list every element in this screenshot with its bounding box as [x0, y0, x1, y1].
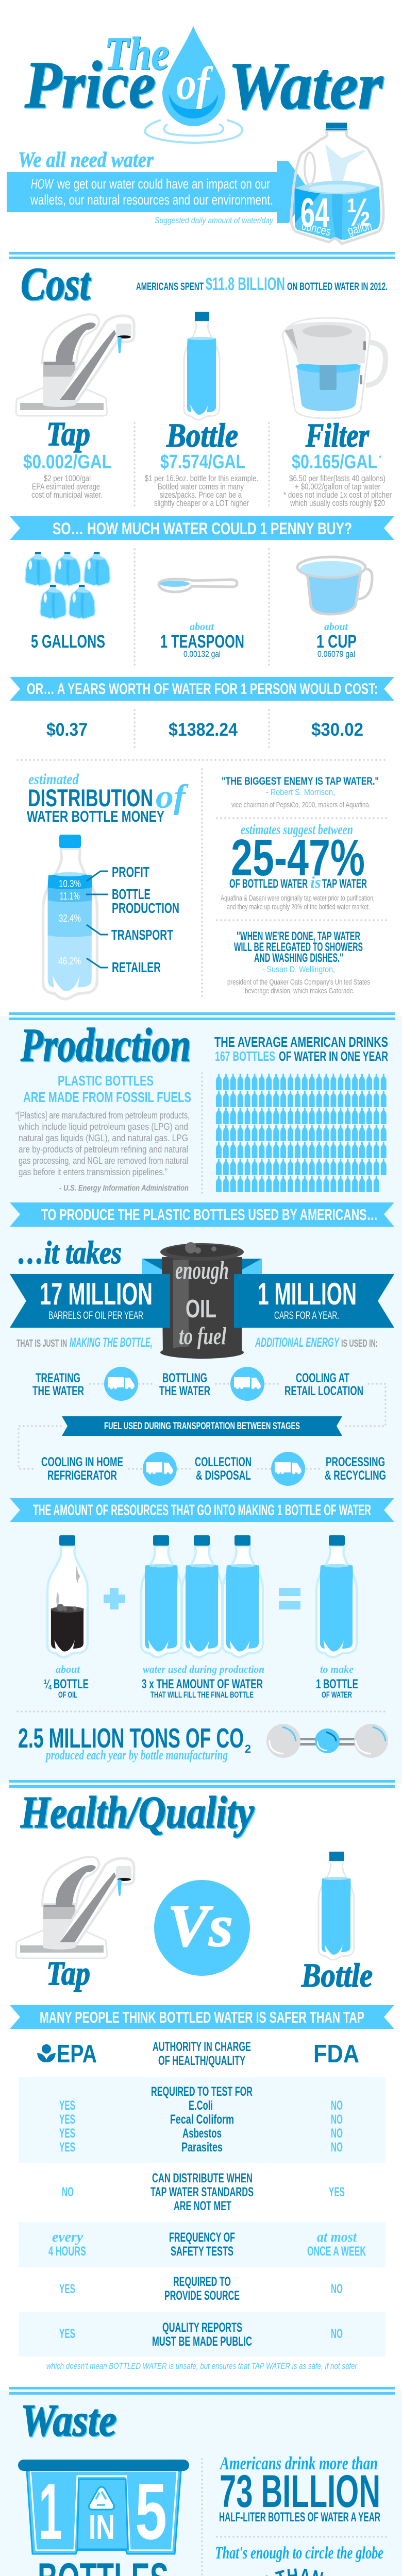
chart: bottle with money split: RETAILER — [112, 959, 161, 975]
labels: tap and bottle — [46, 1955, 373, 1994]
yearly costs: $0.37 — [46, 720, 88, 740]
icon: half gallon jug: ounces — [300, 219, 332, 239]
heading: waste: Waste — [21, 2396, 116, 2446]
divider rules — [9, 1780, 395, 1788]
stage: bottling the water: BOTTLING — [162, 1371, 207, 1385]
row: frequency: FREQUENCY OF — [169, 2230, 235, 2245]
chart: bottle with money split: TRANSPORT — [111, 927, 173, 943]
caption: suggested daily amount: Suggested daily amount of water/day — [155, 216, 274, 225]
notes: price explanations: $1 per 16.9oz. bottle for this example. — [145, 473, 258, 483]
text: just in making the bottle: ADDITIONAL ENERGY — [255, 1335, 340, 1350]
badge: vs — [154, 1880, 250, 1976]
labels: amounts: 1 CUP — [316, 632, 357, 652]
ribbon: fuel used — [62, 1416, 342, 1436]
row: frequency — [48, 2229, 366, 2259]
row: quality reports: YES — [59, 2327, 75, 2341]
illustration: oil barrel and ribbon — [10, 1242, 394, 1359]
title: of — [176, 58, 213, 109]
bottle: water 2 — [182, 1535, 222, 1657]
quote: plastics text — [15, 1110, 190, 1193]
icon: recycling bin 1 in 5: IN — [89, 2508, 115, 2547]
icon: measuring cup — [297, 557, 372, 614]
labels: tap bottle filter — [46, 415, 370, 454]
panel: health and quality — [10, 1788, 394, 2371]
yearly costs: $30.02 — [311, 720, 363, 740]
notes: price explanations — [31, 473, 392, 508]
labels: amounts: 1 TEASPOON — [160, 632, 244, 652]
prices: * — [379, 453, 382, 462]
notes: price explanations: EPA estimated average — [32, 482, 100, 492]
labels: equation captions: 1 BOTTLE — [316, 1677, 358, 1691]
chart: bottle with money split: 32.4% — [59, 913, 81, 924]
heading: distribution: DISTRIBUTION — [28, 784, 153, 811]
labels: tap bottle filter: Filter — [305, 417, 370, 454]
panel: cost — [16, 259, 392, 508]
ribbon: safer than tap — [10, 2005, 394, 2029]
panel: one penny — [10, 516, 394, 998]
logo: EPA — [37, 2040, 97, 2068]
stage: cooling in home — [41, 1455, 123, 1483]
stage: bottling the water: THE WATER — [159, 1384, 210, 1398]
icon: five gallon jugs — [25, 552, 110, 619]
arrow banner: we get our water could have an impact on our — [57, 176, 270, 192]
row: required to test: NO — [331, 2126, 343, 2141]
illustration: oil barrel and ribbon: OIL — [186, 1295, 216, 1323]
row: required to test: E.Coli — [189, 2098, 213, 2113]
title — [24, 28, 383, 123]
heading: distribution: WATER BOTTLE MONEY — [27, 807, 164, 825]
ribbon: how much water — [10, 516, 394, 540]
labels: equation captions: OF OIL — [58, 1690, 77, 1700]
chart: 167 bottle pictogram — [216, 1074, 388, 1193]
stat: 25-47 percent: is — [310, 873, 321, 891]
icon: recycling bin 1 in 5 — [18, 2460, 189, 2556]
icon: faucet — [16, 314, 134, 416]
row: required to test: Parasites — [181, 2140, 223, 2155]
chart: bottle with money split: BOTTLE — [112, 886, 150, 902]
row: can distribute: ARE NOT MET — [174, 2199, 231, 2213]
row: frequency: ONCE A WEEK — [307, 2244, 366, 2259]
illustration: oil barrel and ribbon: 17 MILLION — [40, 1277, 153, 1311]
row: quality reports: QUALITY REPORTS — [162, 2320, 242, 2335]
heading: distribution — [27, 771, 189, 825]
labels: amounts — [31, 632, 357, 659]
labels: about: about — [190, 620, 214, 633]
stage: cooling in home: REFRIGERATOR — [47, 1468, 117, 1483]
icon: water drop with ripples — [145, 26, 242, 143]
stage: cooling in home: COOLING IN HOME — [41, 1455, 123, 1469]
heading: production: Production — [20, 1019, 191, 1071]
icon: filter pitcher — [282, 318, 386, 418]
row: provide source: NO — [331, 2282, 343, 2296]
chart: bottle with money split: 46.2% — [58, 956, 81, 967]
icon: faucet — [16, 1857, 134, 1958]
illustration: oil barrel and ribbon: enough — [175, 1256, 229, 1284]
heading: cost: Cost — [21, 259, 91, 310]
divider rules — [9, 252, 395, 259]
stage: bottling the water — [159, 1371, 210, 1398]
notes: price explanations: + $0.002/gallon of tap water — [295, 482, 380, 492]
quote: plastics text: gas before it enters transmission pipelines.” — [19, 1167, 167, 1177]
bottle: water 1 — [141, 1535, 181, 1657]
quote: Wellington — [227, 929, 370, 995]
labels: tap and bottle: Tap — [46, 1955, 90, 1992]
chart: bottle with money split: PROFIT — [112, 864, 149, 880]
bottle: final water — [316, 1535, 357, 1657]
illustration: oil barrel and ribbon: CARS FOR A YEAR. — [274, 1310, 339, 1321]
ribbon: resources — [10, 1498, 394, 1522]
divider rules — [9, 1012, 395, 1020]
labels: amounts: 5 GALLONS — [31, 632, 105, 652]
icon: truck circle — [104, 1367, 138, 1401]
row: authority: OF HEALTH/QUALITY — [158, 2054, 245, 2068]
row: frequency: at most — [317, 2229, 357, 2245]
icon: CO2 molecule — [266, 1724, 388, 1758]
quote: plastics text: - U.S. Energy Information Administration — [59, 1184, 189, 1193]
ribbon: fuel used: FUEL USED DURING TRANSPORTATION BETWEEN STAGES — [104, 1421, 300, 1432]
icon: equals — [279, 1588, 300, 1609]
badge: vs: Vs — [167, 1893, 233, 1959]
labels: equation captions: about — [56, 1663, 80, 1675]
stat: 73 billion — [215, 2453, 383, 2563]
stage: collection and disposal: & DISPOSAL — [196, 1468, 251, 1483]
stat: 25-47 percent: OF BOTTLED WATER — [229, 877, 308, 891]
icon: teaspoon — [159, 579, 237, 592]
bottle: quarter oil — [47, 1535, 88, 1657]
chart: bottle with money split: PRODUCTION — [112, 900, 179, 916]
text: just in making the bottle: IS USED IN: — [341, 1338, 378, 1349]
labels: tap and bottle: Bottle — [301, 1957, 373, 1994]
stage: treating the water: TREATING — [36, 1371, 80, 1385]
row: quality reports — [59, 2320, 343, 2349]
stage: treating the water: THE WATER — [32, 1384, 84, 1398]
row: required to test: Asbestos — [182, 2126, 222, 2141]
heading: distribution: estimated — [28, 771, 79, 788]
bottle: water 3 — [223, 1535, 263, 1657]
stage: processing and recycling — [325, 1455, 386, 1483]
divider rules — [9, 2387, 395, 2395]
equation: oil plus water equals bottle — [47, 1535, 357, 1657]
stage: collection and disposal: COLLECTION — [195, 1455, 252, 1469]
ribbon: to produce — [10, 1202, 394, 1227]
notes: price explanations: sizes/packs. Price can be a — [160, 490, 242, 500]
arrow banner: wallets, our natural resources and our environment. — [30, 192, 273, 208]
labels: equation captions: to make — [320, 1663, 354, 1675]
logo: EPA: EPA — [57, 2040, 97, 2068]
labels: amounts: 0.06079 gal — [317, 649, 355, 659]
panel: light section backgrounds — [0, 1016, 402, 2576]
icon: half gallon jug: 64 — [300, 190, 329, 235]
row: required to test: NO — [331, 2098, 343, 2113]
notes: price explanations: $2 per 1000/gal — [44, 473, 91, 483]
title: The — [105, 28, 169, 79]
stat: 11.8 billion: $11.8 BILLION — [206, 274, 285, 294]
stat: 25-47 percent — [221, 822, 375, 911]
stat: CO2: 2 — [245, 1742, 251, 1755]
illustration: oil barrel and ribbon: to fuel — [179, 1323, 226, 1350]
yearly costs: $1382.24 — [169, 720, 238, 740]
stat: CO2: produced each year by bottle manufacturing — [45, 1748, 228, 1762]
stat: CO2 — [18, 1723, 251, 1762]
text: just in making the bottle: THAT IS JUST IN — [16, 1338, 67, 1349]
notes: price explanations: slightly cheaper or a LOT higher — [154, 498, 249, 508]
quote: plastics text: are by-products of petroleum refining and natural — [19, 1144, 188, 1155]
stage: collection and disposal — [195, 1455, 252, 1483]
quote: Wellington: AND WASHING DISHES." — [254, 951, 343, 965]
heading: plastic bottles: ARE MADE FROM FOSSIL FUELS — [23, 1089, 191, 1105]
panel: production — [10, 1019, 394, 1762]
row: required to test: YES — [59, 2098, 75, 2113]
row: quality reports: NO — [331, 2327, 343, 2341]
row: quality reports: MUST BE MADE PUBLIC — [152, 2334, 252, 2349]
labels: equation captions: water used during production — [143, 1663, 264, 1675]
arrow banner: HOW — [31, 176, 54, 192]
icon: water bottle — [319, 1852, 354, 1960]
quote: Morrison — [222, 775, 379, 809]
stat: 167 bottles: 167 BOTTLES — [215, 1048, 275, 1064]
row: required to test: Fecal Coliform — [170, 2112, 234, 2127]
quote: plastics text: natural gas liquids (NGL), and natural gas. LPG — [19, 1133, 188, 1143]
icon: recycling bin 1 in 5: 1 — [39, 2467, 62, 2556]
row: provide source: REQUIRED TO — [173, 2275, 231, 2289]
subheading: it takes: …it takes — [18, 1235, 122, 1270]
row: provide source: YES — [59, 2282, 75, 2296]
panel: distribution of money — [27, 771, 387, 999]
row: provide source — [59, 2275, 343, 2303]
labels: equation captions: THAT WILL FILL THE FINAL BOTTLE — [150, 1690, 254, 1700]
heading: plastic bottles: PLASTIC BOTTLES — [58, 1073, 154, 1089]
logo: FDA: FDA — [313, 2040, 359, 2068]
arrow banner — [7, 161, 310, 223]
icon: half gallon jug — [291, 123, 383, 244]
text: just in making the bottle — [16, 1335, 378, 1350]
stage: cooling at retail: COOLING AT — [296, 1371, 349, 1385]
stat: 11.8 billion — [136, 274, 388, 294]
labels: tap bottle filter: Bottle — [166, 417, 238, 454]
illustration: oil barrel and ribbon: BARRELS OF OIL PER YEAR — [48, 1310, 143, 1321]
quote: plastics text: which include liquid petroleum gases (LPG) and — [18, 1122, 188, 1132]
text: just in making the bottle: MAKING THE BOTTLE, — [70, 1335, 153, 1350]
stat: 25-47 percent: estimates suggest between — [241, 822, 353, 837]
stage: cooling at retail — [284, 1371, 363, 1398]
labels: about: about — [324, 620, 348, 633]
row: required to test: YES — [59, 2126, 75, 2141]
yearly costs — [46, 720, 363, 740]
stat: 25-47 percent: TAP WATER — [322, 877, 367, 891]
labels: equation captions: ¼ BOTTLE — [44, 1677, 89, 1691]
prices: $0.002/GAL — [23, 451, 112, 473]
title: Water — [228, 49, 383, 123]
notes: price explanations: cost of municipal water. — [31, 490, 103, 500]
flow: transport stages — [19, 1367, 386, 1486]
heading: plastic bottles — [23, 1073, 191, 1105]
row: required to test: REQUIRED TO TEST FOR — [151, 2084, 253, 2099]
prices — [23, 451, 382, 473]
panel: waste — [18, 2396, 387, 2576]
labels: tap bottle filter: Tap — [46, 415, 90, 453]
icon: truck circle — [143, 1452, 177, 1486]
labels: equation captions: OF WATER — [322, 1690, 352, 1700]
ribbon: year's worth — [10, 677, 394, 701]
icon: water bottle — [184, 312, 220, 420]
labels: equation captions — [44, 1663, 358, 1700]
labels: about — [190, 620, 348, 633]
icon: truck circle — [271, 1452, 305, 1486]
row: required to test — [59, 2084, 343, 2155]
labels: amounts: 0.00132 gal — [183, 649, 221, 659]
icon: half gallon jug: ½ — [347, 191, 371, 234]
quote: Wellington: - Susan D. Wellington, — [262, 964, 335, 974]
stat: 11.8 billion: AMERICANS SPENT — [136, 281, 204, 293]
row: can distribute: TAP WATER STANDARDS — [150, 2185, 254, 2199]
row: authority: AUTHORITY IN CHARGE — [153, 2040, 251, 2054]
stage: treating the water — [32, 1371, 84, 1398]
quote: plastics text: “[Plastics] are manufactured from petroleum products, — [15, 1110, 190, 1121]
row: required to test: YES — [59, 2140, 75, 2155]
subheading: we all need water: We all need water — [18, 148, 154, 172]
quote: plastics text: gas processing, and NGL are removed from natural — [19, 1156, 188, 1166]
icon: plus — [104, 1588, 125, 1609]
row: can distribute — [62, 2171, 345, 2213]
row: required to test: YES — [59, 2112, 75, 2127]
prices: $0.165/GAL — [292, 451, 377, 473]
row: required to test: NO — [331, 2112, 343, 2127]
row: can distribute: YES — [329, 2185, 345, 2199]
icon: half gallon jug: gallon — [346, 219, 373, 238]
quote: Morrison: - Robert S. Morrison, — [266, 787, 335, 797]
chart: bottle with money split — [41, 835, 179, 999]
header panel — [7, 26, 383, 244]
row: required to test: NO — [331, 2140, 343, 2155]
notes: price explanations: Bottled water comes in many — [158, 482, 244, 492]
chart: bottle with money split: 11.1% — [60, 891, 80, 902]
icon: recycling bin 1 in 5: 5 — [135, 2467, 167, 2556]
labels: equation captions: 3 x THE AMOUNT OF WATER — [142, 1677, 263, 1691]
heading: distribution: of — [156, 778, 189, 816]
icon: truck circle — [230, 1367, 264, 1401]
stat: CO2: 2.5 MILLION TONS OF CO — [18, 1723, 244, 1754]
title: Price — [24, 48, 156, 122]
row: provide source: PROVIDE SOURCE — [164, 2289, 240, 2303]
row: frequency: SAFETY TESTS — [171, 2244, 233, 2259]
row: can distribute: NO — [62, 2185, 74, 2199]
row: authority — [153, 2040, 251, 2068]
row: frequency: 4 HOURS — [48, 2244, 86, 2259]
stage: cooling at retail: RETAIL LOCATION — [284, 1384, 363, 1398]
row: frequency: every — [52, 2229, 83, 2245]
row: can distribute: CAN DISTRIBUTE WHEN — [152, 2171, 253, 2185]
chart: bottle with money split: 10.3% — [59, 878, 81, 890]
stat: 167 bottles — [214, 1034, 388, 1064]
prices: $7.574/GAL — [160, 451, 245, 473]
heading: health quality: Health/Quality — [20, 1788, 255, 1838]
quote: Wellington: beverage division, which makes Gatorade. — [245, 987, 355, 995]
table: EPA vs FDA — [19, 2040, 386, 2357]
